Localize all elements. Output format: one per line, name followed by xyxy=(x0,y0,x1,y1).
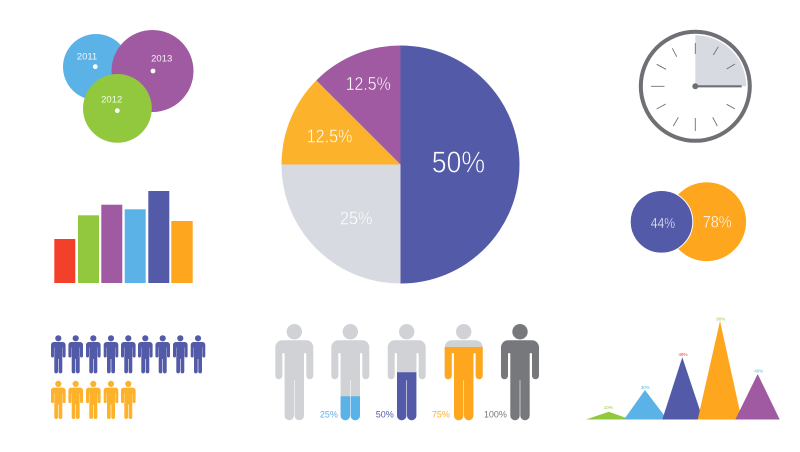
person: 75% filled xyxy=(432,324,483,420)
person: 75% filled: 75% xyxy=(432,410,450,420)
peak: orange xyxy=(698,316,742,420)
icon: clock xyxy=(641,32,750,141)
slice 12.5% orange: 12.5% xyxy=(307,125,352,146)
slice 50%: 50% xyxy=(432,144,485,179)
pictogram: indigo people xyxy=(51,335,205,373)
circle 44%: 44% xyxy=(651,215,675,232)
peak: indigo xyxy=(662,352,703,420)
bar chart xyxy=(54,191,193,283)
mountain chart xyxy=(586,316,780,420)
peak: purple xyxy=(735,368,780,420)
person: 50% filled: 50% xyxy=(376,410,394,420)
person: 50% filled xyxy=(376,324,426,420)
venn comparison xyxy=(630,182,746,261)
slice 25%: 25% xyxy=(340,207,372,228)
person: 100% filled: 100% xyxy=(484,410,507,420)
slice 12.5% purple: 12.5% xyxy=(346,73,391,94)
peak: green xyxy=(586,405,631,420)
slice 25% xyxy=(282,164,400,284)
slice 12.5% purple xyxy=(316,46,400,164)
peak: green: 10% xyxy=(604,405,613,410)
person: 25% filled xyxy=(320,324,369,420)
bubble chart: years xyxy=(63,30,194,143)
peak: blue xyxy=(624,385,667,420)
peak: blue: 30% xyxy=(641,385,650,390)
bubble 2011: 2011 xyxy=(77,51,97,62)
peak: orange: 90% xyxy=(716,316,725,322)
pie chart xyxy=(282,46,520,284)
pictogram: orange people xyxy=(51,381,136,419)
bubble 2013: 2013 xyxy=(151,54,172,65)
bubble 2012: 2012 xyxy=(101,95,122,106)
circle 78%: 78% xyxy=(703,214,732,232)
peak: indigo: 49% xyxy=(678,352,688,357)
slice 50% xyxy=(400,46,520,284)
person: 100% filled xyxy=(484,324,539,420)
slice 12.5% orange xyxy=(282,80,400,164)
peak: purple: 40% xyxy=(754,368,763,374)
person: 25% filled: 25% xyxy=(320,410,338,420)
person: empty xyxy=(275,324,313,420)
